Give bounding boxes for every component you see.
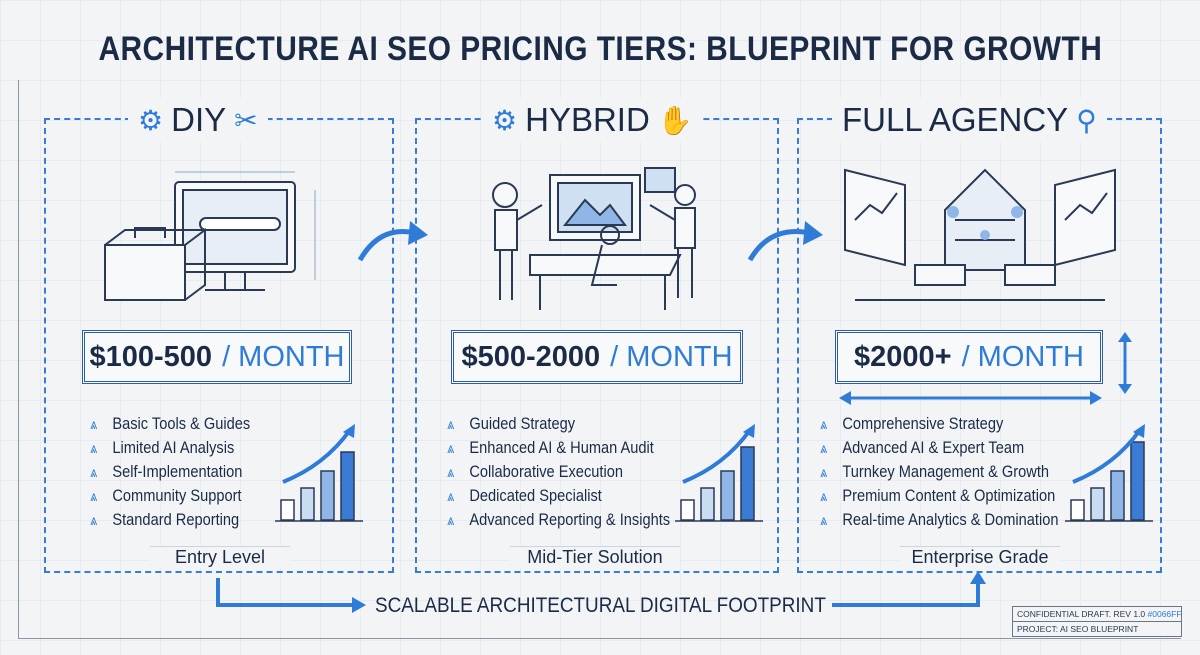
features: Hybrid: Guided Strategy <box>469 414 575 433</box>
price: Hybrid: $500-2000 <box>461 340 600 372</box>
heading: DIY: ✂ <box>234 104 258 136</box>
features: Agency: Turnkey Management & Growth <box>842 462 1049 481</box>
title: ARCHITECTURE AI SEO PRICING TIERS: BLUEPRINT FOR GROWTH <box>98 30 1102 68</box>
arrow: Hybrid to Agency <box>748 221 823 262</box>
price: DIY <box>82 330 352 384</box>
price: Hybrid: / MONTH <box>610 340 733 372</box>
panel: Full Agency <box>797 118 1162 573</box>
heading: Full Agency: FULL AGENCY <box>842 101 1068 138</box>
features: Hybrid: Enhanced AI & Human Audit <box>469 438 654 457</box>
heading: Hybrid: ⚙ <box>492 104 517 136</box>
features: Agency: Real-time Analytics & Domination <box>842 510 1059 529</box>
heading: Full Agency <box>832 98 1107 142</box>
panel: DIY <box>44 118 394 573</box>
features: Agency: ⩓ <box>820 440 827 457</box>
features: DIY: ⩓ <box>90 416 97 433</box>
illustration: robots at desk <box>492 167 696 310</box>
title block <box>1012 606 1182 637</box>
features: Agency: Advanced AI & Expert Team <box>842 438 1024 457</box>
price: Full Agency <box>835 330 1103 384</box>
features: Hybrid: ⩓ <box>447 464 454 481</box>
features: Agency: ⩓ <box>820 488 827 505</box>
features: Agency: Premium Content & Optimization <box>842 486 1055 505</box>
price: DIY: $100-500 <box>90 340 212 372</box>
features: Hybrid: ⩓ <box>447 440 454 457</box>
features: DIY: Standard Reporting <box>112 510 239 529</box>
features: Agency: ⩓ <box>820 464 827 481</box>
illustration: toolbox and monitor <box>104 172 316 301</box>
features: DIY: Self-Implementation <box>112 462 242 481</box>
price: DIY: / MONTH <box>222 340 344 372</box>
heading: Hybrid: HYBRID <box>525 101 650 138</box>
illustration: office building <box>844 168 1116 301</box>
features: DIY: ⩓ <box>90 488 97 505</box>
features: Agency <box>820 414 1059 529</box>
heading: Full Agency: ⚲ <box>1076 104 1097 136</box>
price: Full Agency: / MONTH <box>962 340 1084 372</box>
heading: DIY <box>128 98 268 142</box>
features: Agency: ⩓ <box>820 416 827 433</box>
title block: PROJECT: AI SEO BLUEPRINT <box>1017 624 1138 634</box>
features: Hybrid: Collaborative Execution <box>469 462 623 481</box>
footer: DIY <box>150 546 290 568</box>
features: Hybrid: ⩓ <box>447 416 454 433</box>
bottom flow arrow <box>216 572 986 613</box>
features: Agency: Comprehensive Strategy <box>842 414 1003 433</box>
bottom label: SCALABLE ARCHITECTURAL DIGITAL FOOTPRINT <box>375 594 826 617</box>
heading: DIY: ⚙ <box>138 104 163 136</box>
features: Hybrid <box>447 414 670 529</box>
dimension arrows: Agency <box>839 332 1132 405</box>
features: Hybrid: ⩓ <box>447 488 454 505</box>
chart: Agency <box>1065 424 1153 522</box>
features: DIY: ⩓ <box>90 464 97 481</box>
title block: CONFIDENTIAL DRAFT. REV 1.0 #0066FF <box>1017 609 1182 619</box>
features: Hybrid: ⩓ <box>447 512 454 529</box>
features: DIY: Community Support <box>112 486 242 505</box>
features: Hybrid: Advanced Reporting & Insights <box>469 510 670 529</box>
chart: Hybrid <box>675 424 763 522</box>
chart: DIY <box>275 424 363 522</box>
footer: Hybrid: Mid-Tier Solution <box>527 547 663 567</box>
price: Hybrid <box>451 330 743 384</box>
features: Agency: ⩓ <box>820 512 827 529</box>
features: DIY: Basic Tools & Guides <box>112 414 250 433</box>
heading: DIY: DIY <box>171 101 226 138</box>
features: DIY: ⩓ <box>90 440 97 457</box>
features: Hybrid: Dedicated Specialist <box>469 486 602 505</box>
arrow: DIY to Hybrid <box>358 221 428 262</box>
heading: Hybrid: ✋ <box>658 104 693 136</box>
footer: DIY: Entry Level <box>175 547 265 567</box>
features: DIY: Limited AI Analysis <box>112 438 234 457</box>
features: DIY: ⩓ <box>90 512 97 529</box>
footer: Agency: Enterprise Grade <box>911 547 1049 567</box>
panel: Hybrid <box>415 118 779 573</box>
features: DIY <box>90 414 250 529</box>
heading: Hybrid <box>482 98 703 142</box>
price: Full Agency: $2000+ <box>854 340 952 372</box>
